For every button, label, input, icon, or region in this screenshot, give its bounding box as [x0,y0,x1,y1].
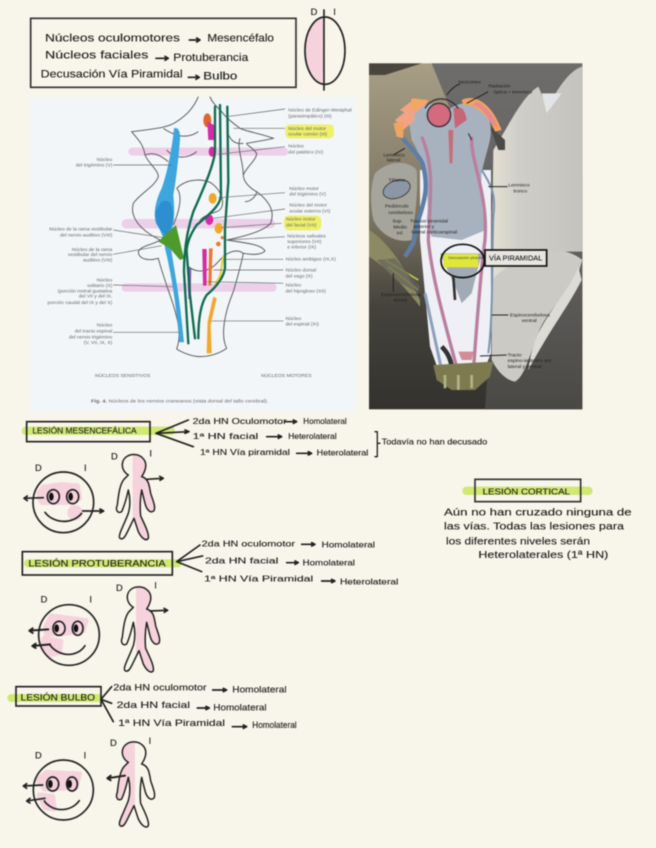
row: pyramidal [200,448,369,458]
photo annotations: Inf. [397,231,404,237]
summary line: oculomotor nuclei [45,33,274,45]
left-hand nuclei labels: del tracto espinal [75,328,112,334]
cortical lesion explanation [444,507,632,561]
right-hand nuclei labels: Núcleo motor [286,217,316,223]
right-hand nuclei labels: ocular externo (VI) [289,208,331,214]
row: facial: 2da HN facial [205,555,279,565]
row: oculomotor [193,417,347,426]
right-hand nuclei labels: NÚCLEOS MOTORES [261,372,312,379]
cortical lesion explanation: los diferentes niveles serán [446,536,590,547]
right-hand nuclei labels: del espinal (XI) [286,322,319,328]
icon: body with lesion: I [154,580,157,590]
left-hand nuclei labels: del trigémino (V) [76,163,113,169]
figure caption: Fig. 4. Núcleos de los nervios craneanos (vista dorsal del tallo cerebral). [91,398,268,404]
green pyramidal tract lines [184,107,215,343]
right-hand nuclei labels: e inferior (IX) [287,244,316,250]
callout: pyramidal pathway: VÍA PIRAMIDAL [489,254,542,263]
photo annotations: lateral corticoespinal [412,229,457,235]
heading: lesión protuberancia [22,552,182,575]
right-hand nuclei labels: Núcleo ambiguo (IX,X) [286,257,336,263]
icon: brain hemispheres oval: D [311,7,318,17]
photo annotations: cerebeloso [388,210,413,216]
left-hand nuclei labels: porción caudal del IX y del X) [47,300,113,306]
left-hand nuclei labels: Núcleo de la rama vestibular [49,227,113,233]
cerebellar lobe [371,163,417,241]
callout: pyramidal pathway [441,244,547,278]
left-hand nuclei labels: del nervio trigémino [69,334,113,340]
row: pyramidal: 1ª HN Vía piramidal [200,448,290,457]
left-hand nuclei labels: (V, VII, IX, X) [84,340,113,346]
right-hand nuclei labels: Núcleo dorsal [286,268,316,274]
inner outlines [145,128,257,271]
row: facial: 2da HN facial [117,700,190,710]
right-hand nuclei labels: Núcleos salivales [287,234,326,240]
row: oculomotor: Homolateral [322,540,375,550]
icon: face with lesion: D [35,750,42,760]
panel: summary of nuclei levels [31,18,296,87]
summary line: pyramidal decussation: Bulbo [203,70,237,82]
right-hand nuclei labels: superiores (VII) [287,239,322,245]
row: pyramidal [118,718,297,730]
icon: face with lesion [24,463,104,533]
row: facial: Homolateral [303,557,355,567]
icon: face with lesion: I [84,463,87,473]
heading: lesión cortical [462,479,593,502]
left-hand nuclei labels: auditivo (VIII) [83,257,113,263]
branching arrows [177,545,203,572]
photo annotations: tronco [513,189,527,195]
icon: face with lesion [29,595,99,665]
heading: lesión cortical: LESIÓN CORTICAL [483,486,570,496]
summary line: oculomotor nuclei: Núcleos oculomotores [45,33,180,45]
section: medulla lesion [7,683,297,827]
left-hand nuclei labels: del VII y del IX, [79,294,112,300]
callout: pyramidal pathway: Decusación piramidal [448,255,487,260]
left-hand nuclei labels: solitario (X) [87,283,113,289]
row: pyramidal [204,573,398,587]
icon: body with lesion [116,580,168,672]
brainstem [420,170,491,390]
photo annotations: lateral y ventral [508,364,541,370]
left-hand nuclei labels: Núcleo de la rama [72,247,113,253]
right-hand nuclei labels: del trigémino (V) [289,192,326,198]
summary line: facial nuclei: Protuberancia [173,52,248,64]
row: oculomotor: Homolateral [303,417,347,426]
photo annotations: Tracto [508,353,522,359]
summary line: facial nuclei [45,49,248,64]
photo annotations: Lemnisco [508,183,530,189]
row: pyramidal: 1ª HN Vía Piramidal [204,573,314,583]
row: oculomotor [202,538,375,550]
motor nuclei [187,113,225,353]
photo annotations: Tálamo [388,178,405,184]
photo annotations: dorsal [393,297,407,303]
photo annotations: Sup. [392,219,403,225]
photo annotations: anterior y [413,224,435,230]
pyramidal tract in pink [422,137,458,373]
brainstem outline [132,97,273,357]
right-hand nuclei labels [261,108,352,379]
icon: body with lesion: D [111,451,118,461]
icon: face with lesion [23,750,93,820]
right-hand nuclei labels: Núcleo motor [289,186,319,192]
photo annotations: ventral [522,318,537,324]
right-hand nuclei labels: Núcleo [288,144,304,150]
icon: body with lesion: I [149,736,151,746]
row: facial [205,555,355,567]
blue sensory nucleus [155,128,184,342]
cortical lesion explanation: Heterolaterales (1ª HN) [478,550,608,561]
row: oculomotor: 2da HN Oculomotor [193,417,287,426]
left-hand nuclei labels: vestibular del nervio [68,252,113,258]
photo annotations: espino-talámico ant. [508,358,552,364]
icon: brain hemispheres oval [305,7,345,90]
icon: brain hemispheres oval: I [333,7,336,17]
icon: face with lesion: I [89,595,92,605]
right-hand nuclei labels: Núcleo de Edinger-Westphal [288,108,352,114]
row: oculomotor: Homolateral [232,685,287,695]
section: cortical lesion [444,479,632,561]
panel: pyramidal tract photo [369,63,582,409]
summary line: facial nuclei: Núcleos faciales [45,49,148,61]
summary line: pyramidal decussation: Decusación Vía Piramidal [41,68,183,80]
green vestibular nucleus [158,225,184,260]
photo annotations: lateral [387,158,400,164]
row: pyramidal: Heterolateral [340,577,398,587]
right-hand nuclei labels: del facial (VII) [286,222,317,228]
right-hand nuclei labels: Núcleo del motor [289,203,327,209]
colored cortex bands [395,98,428,130]
left-hand nuclei labels: (porción rostral gustativa [58,288,113,294]
photo annotations: Espinocerebelosa [510,313,550,319]
section: midbrain lesion [22,417,488,540]
photo annotations: Pedúnculo [385,203,409,209]
label leader lines [113,109,285,332]
cortical lesion explanation: Aún no han cruzado ninguna de [444,507,632,518]
photo annotations: Neocórtex [458,79,482,85]
row: facial [193,432,337,441]
photo annotations: Espinocerebelosa [381,292,421,298]
right-hand nuclei labels: del patético (IV) [288,149,324,155]
photo annotations [381,79,552,370]
cortical lesion explanation: las vías. Todas las lesiones para [444,521,624,532]
section: pons lesion [22,538,398,672]
row: facial: Homolateral [213,702,267,712]
photo annotations: Lemnisco [383,153,405,159]
summary line: pyramidal decussation [41,68,237,82]
row: oculomotor [113,683,287,695]
icon: face with lesion: D [35,463,42,473]
icon: face with lesion: I [84,750,86,760]
row: pyramidal: Heterolateral [317,449,369,458]
photo annotations: Tractos piramidal [410,219,448,225]
right-hand nuclei labels: Núcleo [286,282,301,288]
photo annotations: Radiación [488,83,511,89]
left-hand nuclei labels: Núcleo [97,323,113,329]
photo annotations: óptica + lemnisco [493,89,532,95]
row: oculomotor: 2da HN oculomotor [202,538,295,548]
left-hand nuclei labels: NÚCLEOS SENSITIVOS [95,372,151,379]
left-hand nuclei labels [47,157,151,379]
icon: body with lesion [111,449,163,540]
panel: cranial nerve nuclei diagram [30,97,356,411]
heading: lesión mesencefálica [22,422,175,442]
row: pyramidal: Homolateral [252,720,297,730]
row: oculomotor: 2da HN oculomotor [113,683,207,693]
heading: lesión bulbo [7,687,103,706]
icon: face with lesion: D [41,595,48,605]
bracket note: not yet decussated: Todavía no han decusado [382,438,488,447]
row: pyramidal: 1ª HN Vía Piramidal [118,718,225,728]
right-hand nuclei labels: del hipogloso (XII) [286,288,326,294]
left-hand nuclei labels: del nervio auditivo (VIII) [60,232,113,238]
icon: body with lesion [107,736,155,827]
row: facial [117,700,267,712]
icon: body with lesion: D [116,583,123,593]
branching arrows [101,687,113,722]
right-hand nuclei labels: Núcleo [286,316,301,322]
right-hand nuclei labels: ocular común (III) [288,132,327,138]
photo annotations: Medio [393,224,407,230]
left-hand nuclei labels: Núcleo [97,278,113,284]
heading: lesión mesencefálica: LESIÓN MESENCEFÁLICA [32,427,137,436]
bracket note: not yet decussated [375,432,488,457]
highlight bands [122,124,334,292]
heading: lesión protuberancia: LESIÓN PROTUBERANCIA [28,558,166,568]
white paper leaves [492,67,582,280]
branching arrows [156,420,193,447]
heading: lesión bulbo: LESIÓN BULBO [21,693,95,703]
right-hand nuclei labels: del vago (X) [286,273,313,279]
row: facial: Heterolateral [288,432,337,441]
right-hand nuclei labels: (parasimpático) (III) [288,114,332,120]
spinal cord base [433,362,493,390]
row: facial: 1ª HN facial [193,432,259,441]
icon: body with lesion: D [110,738,117,748]
left-hand nuclei labels: Núcleo [97,157,113,163]
right-hand nuclei labels: Núcleo del motor [288,126,326,132]
icon: body with lesion: I [149,449,152,459]
summary line: oculomotor nuclei: Mesencéfalo [207,33,274,45]
